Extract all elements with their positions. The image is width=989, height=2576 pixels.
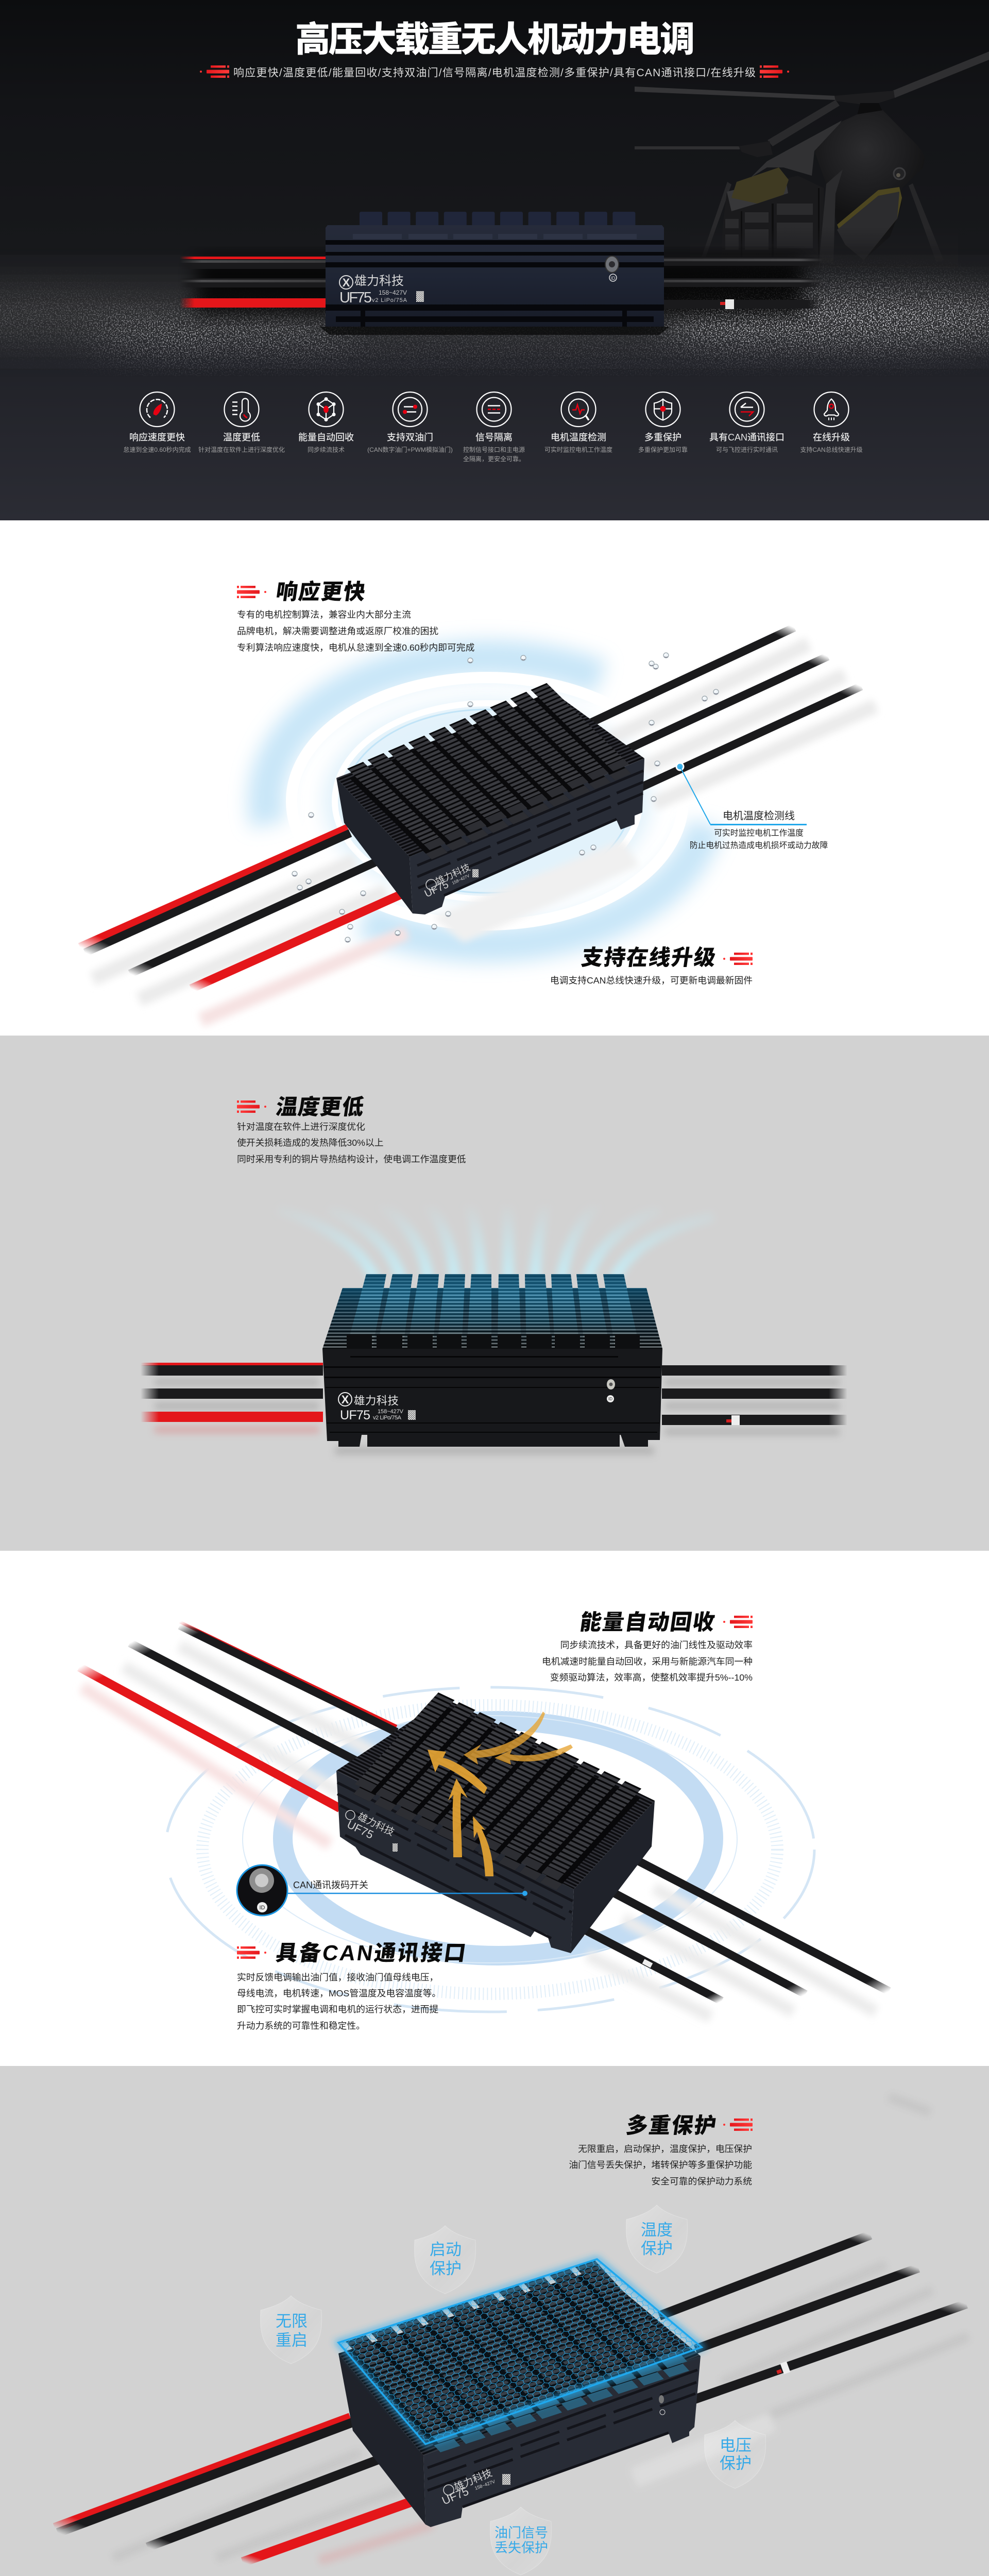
feature: 能量自动回收: 同步续流技术 <box>308 446 345 453</box>
callout: motor temperature wire <box>680 767 828 850</box>
right leg <box>909 183 944 263</box>
helicopter silhouette <box>635 52 989 268</box>
wire shadows <box>113 2097 968 2561</box>
mesh overlay <box>338 2259 702 2444</box>
feature icons row <box>123 392 863 463</box>
feature: 多重保护: 多重保护 <box>644 432 681 443</box>
text: CAN interface description <box>237 1972 441 2031</box>
feature: 温度更低: 针对温度在软件上进行深度优化 <box>198 446 285 453</box>
text: CAN interface description: 即飞控可实时掌握电调和电机的运行状态，进而提 <box>237 2004 438 2014</box>
ground speckles <box>0 252 989 376</box>
wire shadows <box>155 1379 840 1455</box>
product: front ESC with heat sink <box>322 1274 662 1447</box>
text: CAN interface description: 升动力系统的可靠性和稳定性。 <box>237 2021 365 2031</box>
ID dial: ID <box>608 1397 612 1401</box>
shield: 启动保护 <box>415 2226 475 2294</box>
shield: 温度保护 <box>626 2205 687 2273</box>
logo: X <box>342 1393 349 1406</box>
heading: 多重保护: 多重保护 <box>625 2113 718 2138</box>
product: isometric ESC <box>336 683 644 914</box>
wires <box>141 1363 847 1425</box>
left leg <box>702 182 731 257</box>
logo <box>338 1393 416 1422</box>
logo on side face: 158~427V <box>451 873 471 886</box>
shield: 油门信号丢失保护: 丢失保护 <box>494 2540 548 2555</box>
shield: 无限重启 <box>261 2296 321 2364</box>
feature: 信号隔离: 控制信号接口和主电源 <box>463 446 525 453</box>
heading: 支持在线升级: 支持在线升级 <box>580 945 717 970</box>
wire and box reflections <box>93 644 876 1020</box>
wires <box>79 1622 889 2001</box>
logo on side face <box>423 862 479 900</box>
shadow behind wires <box>196 258 804 314</box>
ID dial: ID <box>611 276 616 281</box>
product: isometric ESC <box>336 1692 655 1953</box>
section: lower temperature <box>0 1036 989 1551</box>
logo on side face: UF75 <box>345 1818 376 1841</box>
section: multiple protection <box>0 2066 989 2576</box>
ID dial <box>659 2395 665 2415</box>
fade into ground <box>690 227 958 268</box>
logo on side face: 雄力科技 <box>452 2467 494 2494</box>
text: response description: 品牌电机，解决需要调整进角或返原厂校准的困扰 <box>237 626 438 636</box>
logo: v2 LiPo/75A <box>372 297 407 303</box>
CAN dial switch callout: ID <box>260 1905 265 1911</box>
rotor blades <box>635 87 835 100</box>
callout: motor temperature wire: 可实时监控电机工作温度 <box>714 828 804 838</box>
sensor <box>894 168 905 179</box>
blue ring background <box>266 658 709 944</box>
product: isometric ESC with mesh <box>338 2259 702 2527</box>
shield: 无限重启: 无限 <box>276 2312 308 2330</box>
text: temperature description: 同时采用专利的铜片导热结构设计，使电调工作温度更低 <box>237 1154 466 1164</box>
feature: 响应速度更快: 响应速度更快 <box>129 432 185 443</box>
section: faster response <box>0 520 989 1036</box>
heat rays <box>278 1203 713 1283</box>
feature: 响应速度更快 <box>123 392 191 453</box>
text: response description: 专利算法响应速度快，电机从怠速到全速0.60秒内即可完成 <box>237 642 475 653</box>
shield: 启动保护: 启动 <box>430 2241 462 2259</box>
text: protection description: 油门信号丢失保护，堵转保护等多重保护功能 <box>569 2160 752 2170</box>
feature: 具有CAN通讯接口 <box>709 392 785 453</box>
feature: 在线升级 <box>800 392 863 453</box>
text: protection description: 安全可靠的保护动力系统 <box>651 2176 752 2187</box>
callout: motor temperature wire: 电机温度检测线 <box>723 810 795 822</box>
ground haze <box>0 278 989 345</box>
feature: 信号隔离: 全隔离，更安全可靠。 <box>463 455 525 463</box>
logo: 雄力科技 <box>354 1395 399 1407</box>
text: protection description: 无限重启，启动保护，温度保护，电压保护 <box>578 2144 752 2154</box>
logo on side face: 雄力科技 <box>356 1811 396 1838</box>
hero title: 高压大载重无人机动力电调 <box>295 20 695 59</box>
heading: 响应更快: 响应更快 <box>275 580 367 604</box>
feature: 支持双油门 <box>367 392 453 453</box>
text: temperature description: 使开关损耗造成的发热降低30%以上 <box>237 1138 384 1148</box>
heading: 具备CAN通讯接口: 具备CAN通讯接口 <box>275 1941 467 1965</box>
logo: UF75 <box>339 290 372 306</box>
droplets <box>292 653 719 942</box>
logo on side face <box>345 1810 398 1852</box>
feature: 支持双油门: (CAN数字油门+PWM模拟油门) <box>367 446 453 453</box>
main body <box>814 110 925 260</box>
feature: 具有CAN通讯接口: 具有CAN通讯接口 <box>709 432 785 443</box>
text: CAN interface description: 实时反馈电调输出油门值，接收油门值母线电压， <box>237 1972 438 1982</box>
logo on side face <box>440 2467 510 2507</box>
CAN dial switch callout: CAN通讯拨码开关 <box>293 1880 368 1890</box>
text: response description <box>237 609 475 653</box>
feature: 温度更低: 温度更低 <box>223 432 260 443</box>
feature: 具有CAN通讯接口: 可与飞控进行实时通讯 <box>716 446 778 453</box>
logo: X <box>343 276 350 289</box>
feature: 温度更低 <box>198 392 285 453</box>
feature: 响应速度更快: 怠速到全速0.60秒内完成 <box>123 446 191 453</box>
logo on side face: UF75 <box>423 879 450 900</box>
text: energy recovery description: 变频驱动算法，效率高，使整机效率提升5%--10% <box>550 1672 753 1683</box>
CAN dial switch callout <box>237 1865 527 1916</box>
ID dial <box>605 256 619 281</box>
logo on side face: 158~427V <box>474 2479 496 2491</box>
text: temperature description: 针对温度在软件上进行深度优化 <box>237 1122 365 1132</box>
wires <box>55 2235 966 2562</box>
callout: motor temperature wire: 防止电机过热造成电机损坏或动力故障 <box>690 841 828 850</box>
logo: 雄力科技 <box>354 274 404 288</box>
heading: 温度更低: 温度更低 <box>275 1095 365 1119</box>
text: energy recovery description <box>542 1640 753 1683</box>
logo: 158~427V <box>378 1409 404 1415</box>
feature: 信号隔离 <box>463 392 525 463</box>
feature: 能量自动回收 <box>298 392 354 453</box>
feature: 能量自动回收: 能量自动回收 <box>298 432 354 443</box>
battery modules <box>721 176 824 263</box>
text: online upgrade description: 电调支持CAN总线快速升级，可更新电调最新固件 <box>550 975 753 986</box>
shield: 温度保护: 温度 <box>641 2221 673 2239</box>
yellow belly <box>837 187 902 260</box>
center leg <box>819 170 843 263</box>
logo on side face: 雄力科技 <box>434 862 472 887</box>
shield: 油门信号丢失保护 <box>490 2507 551 2575</box>
feature: 多重保护: 多重保护更加可靠 <box>638 446 688 453</box>
logo: v2 LiPo/75A <box>373 1415 402 1421</box>
heading: 能量自动回收: 能量自动回收 <box>578 1610 716 1634</box>
text: energy recovery description: 同步续流技术，具备更好的油门线性及驱动效率 <box>560 1640 753 1650</box>
ID dial <box>607 1379 615 1402</box>
gold energy arrows <box>428 1711 573 1876</box>
feature: 电机温度检测: 可实时监控电机工作温度 <box>544 446 612 453</box>
logo <box>339 274 424 306</box>
text: CAN interface description: 母线电流，电机转速，MOS管温度及电容温度等。 <box>237 1988 441 1998</box>
feature: 信号隔离: 信号隔离 <box>475 432 513 443</box>
logo: 158~427V <box>379 289 407 296</box>
section: energy recovery <box>0 1551 989 2066</box>
wires <box>80 628 861 989</box>
shield: 油门信号丢失保护: 油门信号 <box>494 2525 548 2540</box>
shield: 无限重启: 重启 <box>276 2331 308 2349</box>
feature: 电机温度检测 <box>544 392 612 453</box>
logo: UF75 <box>340 1408 370 1422</box>
text: response description: 专有的电机控制算法，兼容业内大部分主流 <box>237 609 411 620</box>
shoulder panel <box>751 121 842 178</box>
logo on side face: UF75 <box>440 2485 470 2507</box>
hero wires <box>180 257 824 309</box>
section: hero <box>0 0 989 520</box>
hero product front view <box>319 212 670 335</box>
HUD ring background <box>165 1687 814 2012</box>
feature: 电机温度检测: 电机温度检测 <box>551 432 606 443</box>
feature: 多重保护 <box>638 392 688 453</box>
shield: 电压保护: 电压 <box>720 2436 752 2454</box>
shield: 电压保护 <box>705 2420 765 2488</box>
shield: 启动保护: 保护 <box>430 2260 462 2278</box>
wire shadows <box>82 1646 876 2017</box>
text: temperature description <box>237 1122 466 1164</box>
yellow panel <box>731 167 789 204</box>
shield: 温度保护: 保护 <box>641 2240 673 2258</box>
feature: 在线升级: 在线升级 <box>813 432 850 443</box>
hero feature list: 响应更快/温度更低/能量回收/支持双油门/信号隔离/电机温度检测/多重保护/具有CAN通讯接口/在线升级 <box>233 67 756 79</box>
text: energy recovery description: 电机减速时能量自动回收，采用与新能源汽车同一种 <box>542 1656 753 1667</box>
feature: 支持双油门: 支持双油门 <box>387 432 433 443</box>
text: protection description <box>569 2144 752 2187</box>
feature: 在线升级: 支持CAN总线快速升级 <box>800 446 863 453</box>
shield: 电压保护: 保护 <box>720 2454 752 2472</box>
